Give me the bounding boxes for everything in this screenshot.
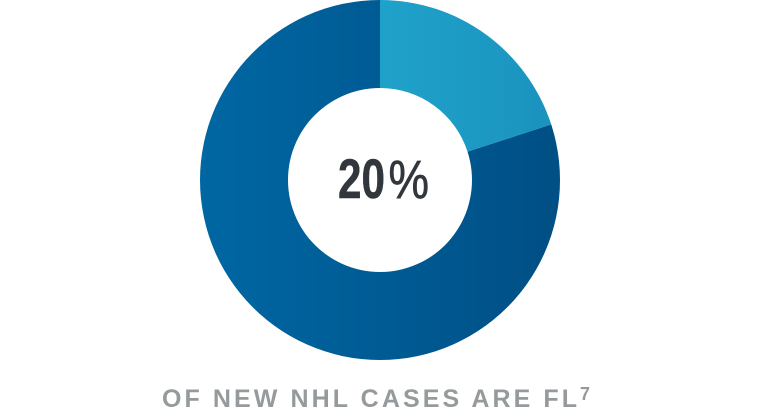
center value: 20%: 20 bbox=[338, 147, 385, 210]
center value: 20% bbox=[338, 147, 429, 210]
center value: 20%: % bbox=[388, 150, 429, 210]
footnote marker: 7 bbox=[580, 384, 590, 404]
segment: 20% FL bbox=[380, 0, 551, 152]
donut chart bbox=[200, 0, 560, 360]
segment: remaining 80% bbox=[200, 0, 560, 360]
